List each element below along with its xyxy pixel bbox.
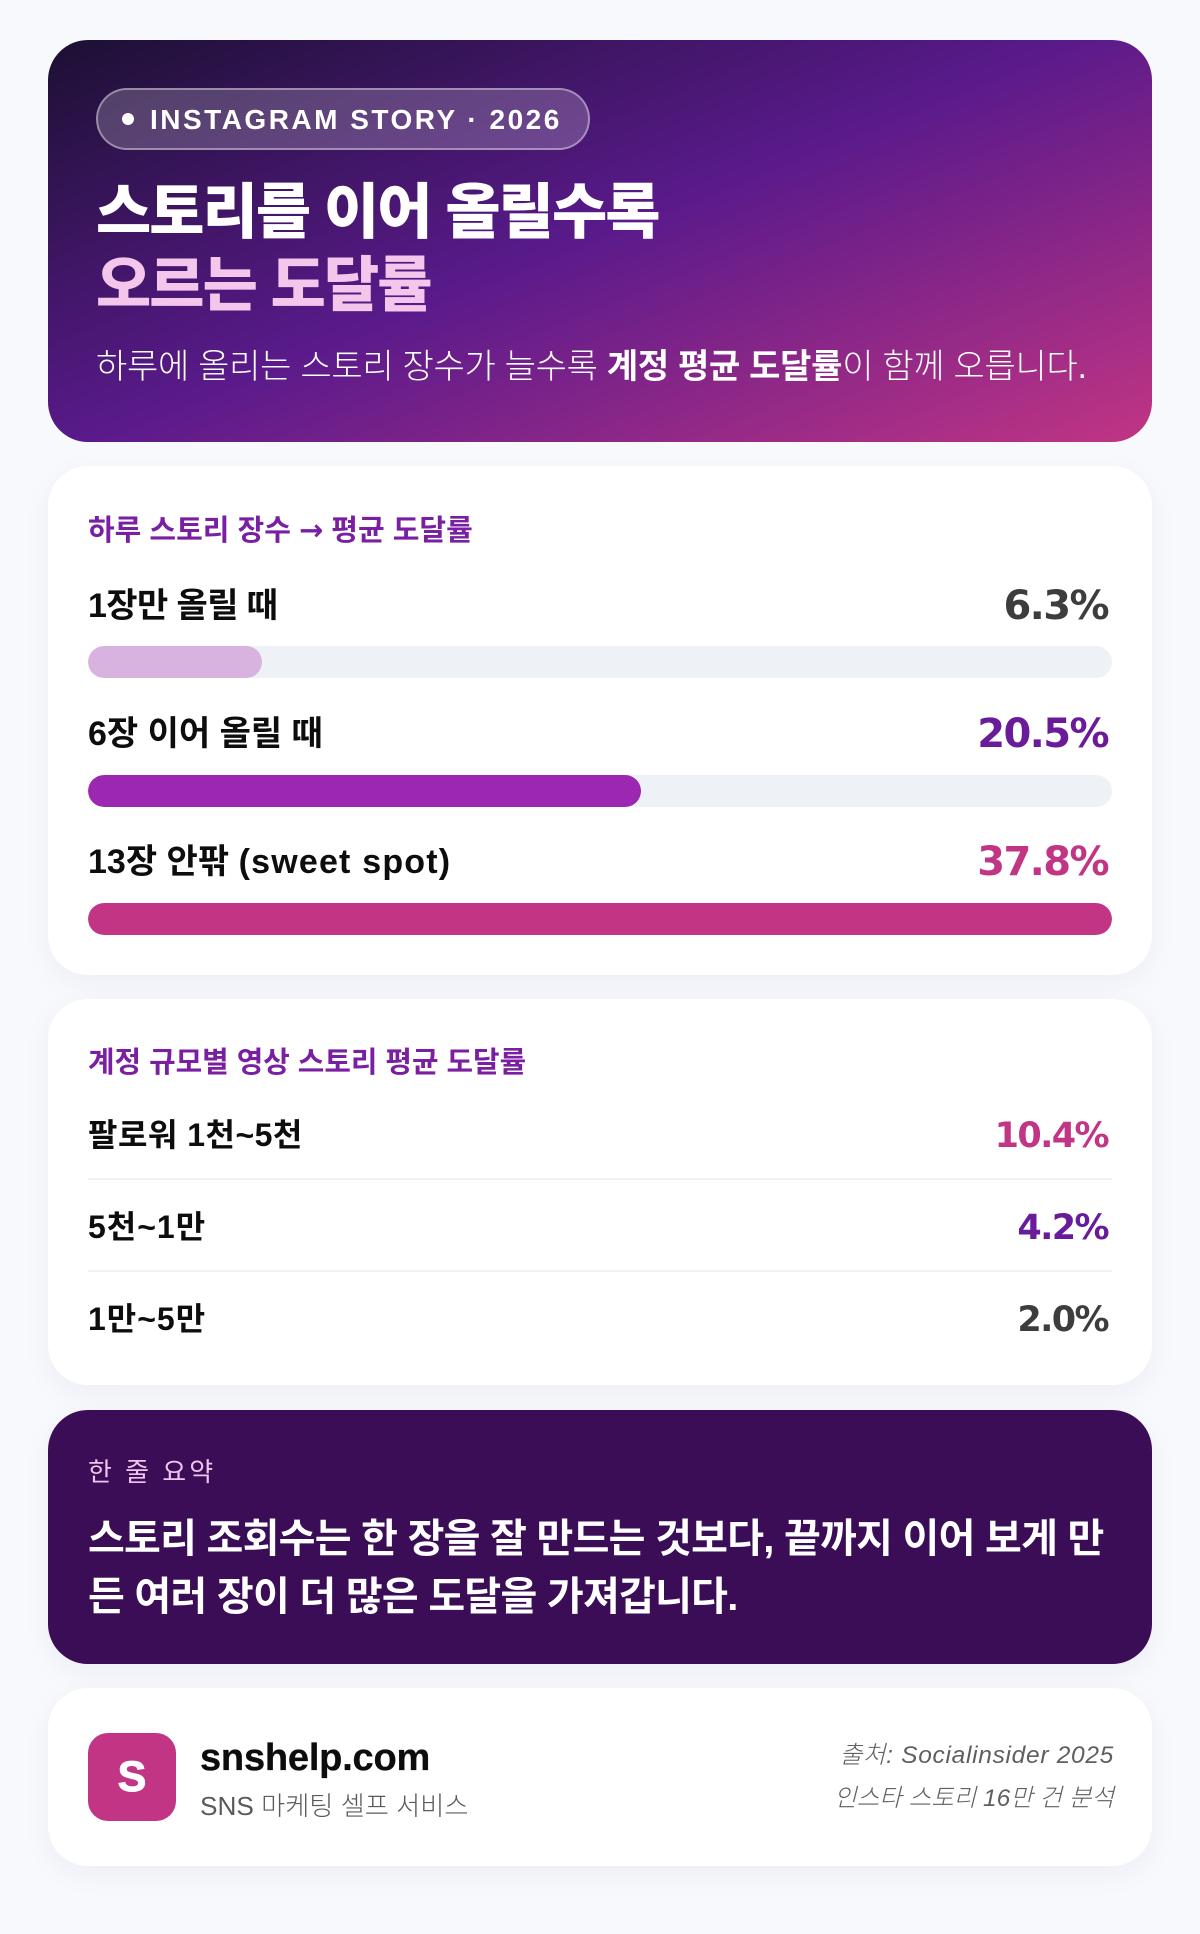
label: 6 stories: 6장 이어 올릴 때 — [88, 715, 323, 753]
panel heading: account size: 계정 규모별 영상 스토리 평균 도달률 — [88, 1047, 526, 1079]
summary panel — [48, 1410, 1152, 1664]
footer panel — [48, 1688, 1152, 1866]
bar: 6 stories — [88, 775, 1112, 807]
logo icon — [88, 1733, 176, 1821]
summary text: 든 여러 장이 더 많은 도달을 가져갑니다. — [88, 1575, 738, 1619]
row label: 10k-50k: 1만~5만 — [88, 1301, 206, 1337]
badge — [96, 88, 590, 150]
brand name: snshelp.com — [200, 1737, 430, 1779]
badge text: INSTAGRAM STORY · 2026 — [150, 104, 562, 135]
brand tagline: SNS 마케팅 셀프 서비스 — [200, 1791, 468, 1821]
row label: 5k-10k: 5천~1만 — [88, 1209, 206, 1245]
summary text: 스토리 조회수는 한 장을 잘 만드는 것보다, 끝까지 이어 보게 만 — [88, 1517, 1104, 1561]
row value: 4.2%: 4.2% — [1017, 1208, 1108, 1248]
title — [96, 179, 659, 319]
source: 출처: Socialinsider 2025 — [840, 1742, 1114, 1769]
bar: 1 story — [88, 646, 1112, 678]
title: 오르는 도달률 — [96, 252, 431, 319]
source — [834, 1742, 1116, 1812]
label: 1 story: 1장만 올릴 때 — [88, 587, 277, 625]
hero panel — [48, 40, 1152, 442]
value: 6.3%: 6.3% — [1003, 583, 1108, 629]
row value: 2.0%: 2.0% — [1017, 1300, 1108, 1340]
logo icon: S — [118, 1753, 146, 1801]
source: 인스타 스토리 16만 건 분석 — [834, 1785, 1114, 1812]
title: 스토리를 이어 올릴수록 — [96, 179, 659, 246]
value: 20.5%: 20.5% — [977, 711, 1108, 757]
row value: 10.4%: 10.4% — [995, 1116, 1108, 1156]
summary label: 한 줄 요약 — [88, 1457, 216, 1487]
value: 37.8%: 37.8% — [977, 839, 1108, 885]
summary text — [88, 1517, 1104, 1619]
panel: account size — [48, 999, 1152, 1385]
label: 13 stories: 13장 안팎 (sweet spot) — [88, 843, 451, 881]
row label: 1k-5k: 팔로워 1천~5천 — [88, 1117, 303, 1153]
panel: stories vs reach — [48, 466, 1152, 975]
bar: 13 stories — [88, 903, 1112, 935]
panel heading: stories vs reach: 하루 스토리 장수 → 평균 도달률 — [88, 513, 473, 547]
subtitle: 하루에 올리는 스토리 장수가 늘수록 계정 평균 도달률이 함께 오릅니다. — [96, 348, 1087, 386]
badge dot — [122, 113, 134, 125]
